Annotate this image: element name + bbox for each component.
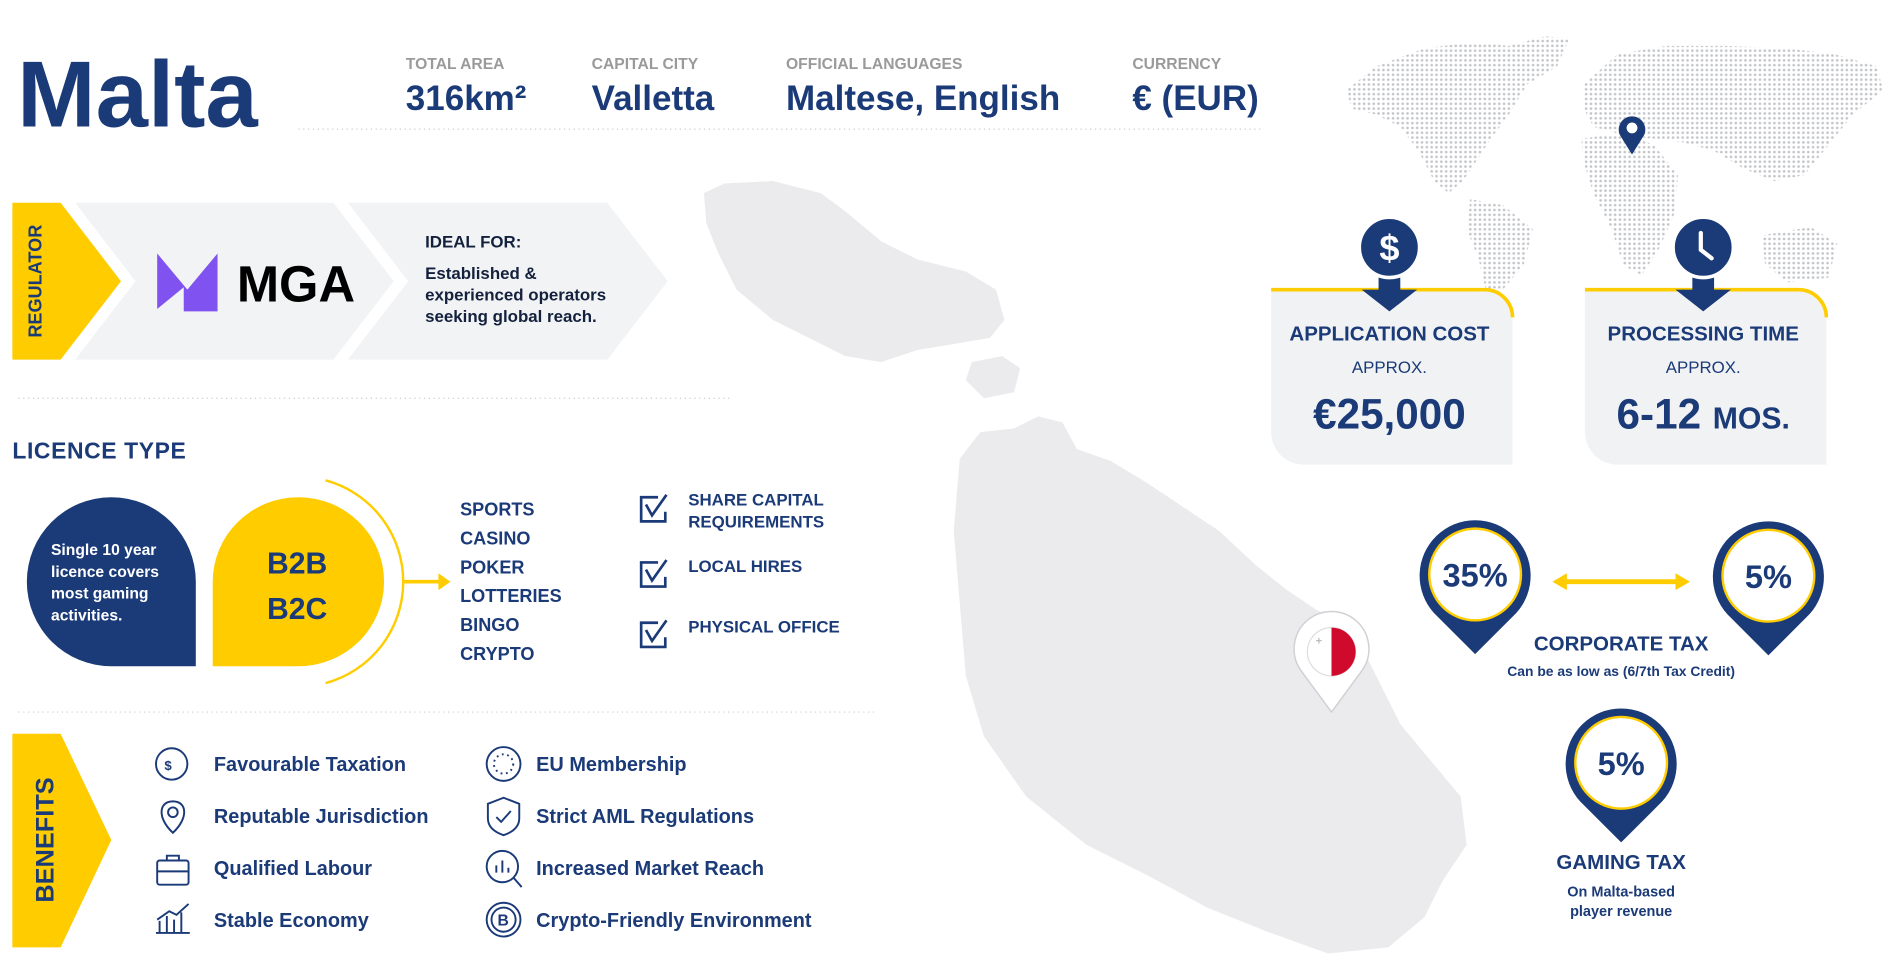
benefits panel: Favourable Taxation (214, 754, 406, 776)
ideal for text: experienced operators (425, 286, 606, 305)
licence shapes: most gaming (51, 586, 149, 603)
icon: Malta flag pin: + (1316, 635, 1322, 647)
title: Malta (17, 42, 258, 147)
corporate tax pins: 5% (1745, 559, 1792, 595)
benefits panel: Increased Market Reach (536, 858, 764, 880)
regulator band: REGULATOR (25, 225, 45, 338)
requirements checklist: LOCAL HIRES (688, 557, 802, 576)
licence type heading: LICENCE TYPE (12, 438, 186, 464)
facts header: CAPITAL CITY (592, 56, 699, 73)
licence activities list: POKER (460, 557, 524, 577)
corporate tax pins: Can be as low as (6/7th Tax Credit) (1507, 663, 1735, 679)
gaming tax pin: On Malta-based (1567, 885, 1675, 901)
ideal for text: seeking global reach. (425, 307, 597, 326)
licence shapes: activities. (51, 607, 122, 624)
gaming tax pin (1556, 708, 1686, 920)
card: application cost: APPROX. (1352, 358, 1427, 377)
gaming tax pin: GAMING TAX (1556, 851, 1686, 874)
facts header: 316km² (406, 79, 526, 118)
gaming tax pin: player revenue (1570, 904, 1672, 920)
corporate tax pins: CORPORATE TAX (1534, 633, 1709, 656)
icon: MGA logo (157, 253, 355, 313)
licence activities list: LOTTERIES (460, 586, 562, 606)
card: processing time (1585, 217, 1826, 465)
licence activities list: CASINO (460, 528, 530, 548)
gaming tax pin: 5% (1598, 746, 1645, 782)
corporate tax pins: 35% (1443, 558, 1508, 594)
benefit icons: $ (164, 758, 172, 773)
facts header: € (EUR) (1132, 79, 1259, 118)
licence activities list (460, 499, 562, 664)
facts header: Maltese, English (786, 79, 1060, 118)
icon: clock (1673, 217, 1733, 311)
licence shapes: Single 10 year (51, 542, 156, 559)
corporate tax pins (1420, 520, 1824, 679)
requirements checklist (641, 491, 840, 647)
licence shapes: B2C (267, 593, 327, 626)
background map: Malta islands (704, 181, 1467, 953)
ideal for text: Established & (425, 264, 537, 283)
facts header (406, 56, 1259, 118)
requirements checklist: REQUIREMENTS (688, 512, 824, 531)
icon: MGA logo: MGA (237, 256, 355, 313)
card: application cost: €25,000 (1313, 390, 1466, 437)
benefits panel: EU Membership (536, 754, 687, 776)
ideal for text (425, 232, 606, 326)
arrow (403, 573, 450, 590)
requirements checklist: PHYSICAL OFFICE (688, 617, 840, 636)
card: processing time: APPROX. (1666, 358, 1741, 377)
facts header: TOTAL AREA (406, 56, 504, 73)
requirements checklist: SHARE CAPITAL (688, 491, 824, 510)
licence shapes: licence covers (51, 564, 159, 581)
regulator band (12, 203, 668, 360)
icon: dollar (1359, 217, 1420, 311)
facts header: OFFICIAL LANGUAGES (786, 56, 962, 73)
icon: Malta flag pin (1294, 611, 1369, 712)
benefits panel: Strict AML Regulations (536, 806, 754, 828)
icon: map pin (1619, 116, 1645, 154)
benefits panel (12, 734, 812, 947)
benefits panel: Stable Economy (214, 910, 369, 932)
ideal for text: IDEAL FOR: (425, 232, 521, 251)
card: application cost: APPLICATION COST (1289, 322, 1490, 345)
card: application cost (1271, 217, 1513, 465)
benefit icons (156, 747, 522, 937)
licence shapes (27, 480, 403, 683)
licence shapes: B2B (267, 547, 327, 580)
benefit icons: B (498, 913, 509, 930)
licence activities list: BINGO (460, 615, 519, 635)
benefits panel: Crypto-Friendly Environment (536, 910, 812, 932)
benefits panel: Reputable Jurisdiction (214, 806, 428, 828)
benefits panel: BENEFITS (31, 777, 59, 903)
card: processing time: 6-12 MOS. (1617, 390, 1790, 437)
card: processing time: PROCESSING TIME (1608, 322, 1799, 345)
facts header: CURRENCY (1132, 56, 1222, 73)
licence activities list: SPORTS (460, 499, 535, 519)
licence activities list: CRYPTO (460, 644, 535, 664)
icon: dollar: $ (1379, 228, 1400, 269)
world dot map (1346, 36, 1883, 296)
facts header: Valletta (592, 79, 715, 118)
benefits panel: Qualified Labour (214, 858, 372, 880)
